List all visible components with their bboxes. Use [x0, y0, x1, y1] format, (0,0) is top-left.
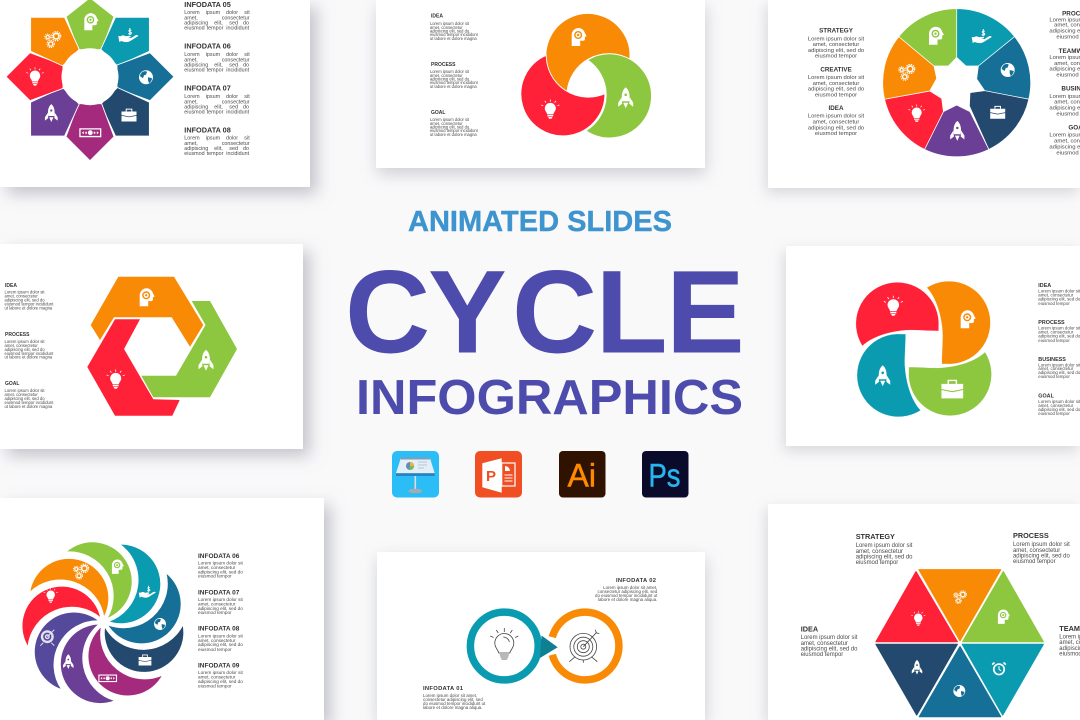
text: strategy: Lorem ipsum dolor sit — [856, 543, 913, 549]
text: infodata 06: sed — [229, 62, 238, 68]
text: infodata 02: do eiusmod tempor incididunt ut — [595, 593, 658, 598]
text: process — [1013, 531, 1070, 565]
text: infodata 07: sit — [244, 94, 250, 100]
text: infodata 08: eiusmod — [184, 151, 205, 157]
text: infodata 06 to 09: INFODATA 06 — [198, 553, 240, 560]
text: idea, process, goal: eiusmod tempor incididunt — [4, 302, 54, 306]
hexagon triangles chart — [876, 570, 1043, 717]
icon: light bulb — [490, 628, 518, 659]
panel: four-lobe pinwheel, middle right — [786, 246, 1080, 446]
three-circle icons — [541, 28, 633, 119]
text: strategy, creative, idea: eiusmod tempor — [815, 131, 857, 137]
hexagon ring icons — [107, 288, 214, 389]
text: infodata 05: dolor — [226, 10, 238, 16]
text: idea, process, goal: adipiscing elit, sed do — [4, 396, 45, 401]
text: infodata 06: elit, — [214, 62, 223, 68]
text: strategy: eiusmod tempor — [856, 560, 898, 566]
text: infodata 05: adipiscing — [184, 20, 208, 26]
text: infodata 07: consectetur — [222, 99, 250, 105]
text: idea — [801, 624, 858, 658]
text: process: amet, consectetur — [1013, 548, 1060, 554]
text: idea, process, goal: Lorem ipsum dolor sit — [4, 388, 45, 393]
text: strategy, creative, idea — [808, 28, 865, 137]
text: strategy, creative, idea: amet, consectetur — [813, 120, 859, 126]
text: infodata 08: sed — [229, 146, 238, 152]
text: idea, process, business, goal: adipiscing elit, sed do — [1038, 334, 1080, 338]
text: infodata 05 — [184, 0, 250, 32]
text: strategy, creative, idea: Lorem ipsum dolor sit — [808, 36, 865, 42]
text: infodata 08 — [184, 125, 250, 157]
text: idea, process, business, goal: PROCESS — [1038, 320, 1065, 326]
text: goal: amet, consectetur — [430, 121, 463, 126]
text: infodata 01: INFODATA 01 — [423, 686, 464, 692]
octagon icons — [26, 13, 153, 137]
text: infodata 06: do — [243, 62, 249, 68]
text: strategy: amet, consectetur — [856, 549, 903, 555]
text: infodata 01: do eiusmod tempor incididunt ut — [423, 701, 486, 706]
text: process — [430, 62, 479, 89]
text: idea: eiusmod tempor incididunt — [430, 32, 479, 37]
text: process: Lorem ipsum dolor sit — [1013, 542, 1070, 548]
icon: photoshop — [642, 451, 688, 498]
three-circle chart — [521, 14, 652, 138]
text: idea, process, business, goal: Lorem ipsum dolor sit — [1038, 288, 1080, 294]
text: idea, process, business, goal: eiusmod tempor — [1038, 301, 1070, 306]
text: infodata 06 — [184, 42, 250, 73]
text: strategy, creative, idea: CREATIVE — [820, 66, 852, 73]
text: idea, process, goal: Lorem ipsum dolor sit — [4, 339, 45, 344]
text: infodata 06: ipsum — [206, 52, 221, 58]
text: goal — [430, 110, 479, 137]
text: infodata 08: consectetur — [222, 141, 250, 147]
text: infodata 05: incididunt — [226, 26, 250, 32]
text: infodata 06: INFODATA 06 — [184, 42, 231, 51]
text: infodata 06: Lorem — [184, 52, 200, 58]
swirl chart — [18, 536, 192, 710]
text: idea, process, goal: eiusmod tempor incididunt — [4, 351, 54, 356]
text: infodata 08: sit — [244, 136, 250, 142]
text: strategy, creative, idea: STRATEGY — [819, 28, 854, 34]
hexagon triangle icons — [911, 591, 1010, 697]
orange ring — [552, 612, 619, 680]
text: infodata 08: INFODATA 08 — [184, 125, 231, 134]
text: goal: adipiscing elit, sed do — [430, 124, 470, 129]
text: idea, process, business, goal: Lorem ipsum dolor sit — [1038, 326, 1080, 330]
text: infodata 06 to 09: eiusmod tempor — [198, 610, 232, 615]
octagon chart — [6, 0, 174, 161]
text: infodata 06 to 09: eiusmod tempor — [198, 647, 232, 652]
text: infodata 06 to 09: Lorem ipsum dolor sit — [198, 670, 244, 675]
text: infodata 05: elit, — [214, 20, 223, 26]
text: idea: adipiscing elit, sed do — [430, 28, 470, 33]
text: process, teamwork, business, goal — [1049, 10, 1080, 156]
icon: photoshop: Ps — [648, 458, 680, 494]
text: idea, process, business, goal: eiusmod tempor — [1038, 374, 1070, 379]
text: idea, process, business, goal: BUSINESS — [1038, 357, 1066, 363]
hexagon ring chart — [87, 277, 237, 416]
text: infodata 01: consectetur adipiscing elit, sed — [423, 697, 483, 702]
text: process: adipiscing elit, sed do — [1013, 554, 1070, 560]
text: infodata 07: ipsum — [206, 94, 221, 100]
text: idea: Lorem ipsum dolor sit — [801, 635, 858, 641]
text: infodata 07: elit, — [214, 104, 223, 110]
panel: nine-petal swirl, bottom left — [0, 498, 324, 720]
icon: powerpoint: P — [486, 468, 496, 485]
text: infodata 05: INFODATA 05 — [184, 0, 231, 9]
text: strategy, creative, idea: amet, consectetur — [813, 42, 859, 48]
icon: illustrator — [559, 451, 606, 498]
text: infodata 02: labore et dolore magna aliqua. — [598, 597, 657, 602]
text: idea: amet, consectetur — [801, 641, 848, 647]
text: infodata 08: do — [243, 146, 249, 152]
text: infodata 07: INFODATA 07 — [184, 84, 231, 93]
text: infodata 06 to 09: amet, consectetur — [198, 675, 236, 680]
text: infodata 05: do — [243, 20, 249, 26]
text: infodata 05: sed — [229, 20, 238, 26]
text: infodata 06 to 09: adipiscing elit, sed do — [198, 679, 243, 684]
text: strategy, creative, idea: adipiscing elit, sed do — [808, 87, 865, 93]
text: infodata 06 to 09: adipiscing elit, sed do — [198, 569, 243, 574]
text: process: adipiscing elit, sed do — [430, 76, 470, 81]
text: infodata 07: tempor — [207, 109, 224, 115]
text: strategy, creative, idea: amet, consectetur — [813, 81, 859, 87]
text: idea, process, goal: ut labore et dolore magna — [4, 305, 53, 310]
text: idea, process, business, goal: eiusmod tempor — [1038, 338, 1070, 343]
text: strategy — [856, 532, 913, 566]
text: infodata 06 to 09 — [198, 553, 244, 688]
icon: target with arrow — [569, 630, 599, 663]
text: idea, process, goal: adipiscing elit, sed do — [4, 298, 45, 302]
text: idea, process, goal: Lorem ipsum dolor sit — [4, 290, 45, 295]
text: teamwork — [1059, 624, 1080, 658]
text: idea, process, goal: amet, consectetur — [4, 392, 38, 397]
text: process: Lorem ipsum dolor sit — [430, 69, 470, 74]
text: idea, process, business, goal: amet, consectetur — [1038, 330, 1074, 334]
text: infodata 01: labore et dolore magna aliqua. — [423, 705, 482, 710]
text: infodata 08: amet, — [184, 141, 198, 147]
text: infodata 06 to 09: adipiscing elit, sed do — [198, 642, 243, 647]
text: idea, process, goal: GOAL — [5, 381, 19, 387]
text: idea, process, business, goal: adipiscing elit, sed do — [1038, 370, 1080, 375]
title: infographics: INFOGRAPHICS — [356, 371, 743, 425]
text: strategy, creative, idea: eiusmod tempor — [815, 92, 857, 98]
text: infodata 06 to 09: Lorem ipsum dolor sit — [198, 597, 244, 602]
text: infodata 01: Lorem ipsum dolor sit amet, — [423, 693, 477, 698]
text: infodata 08: adipiscing — [184, 146, 208, 152]
text: strategy, creative, idea: Lorem ipsum dolor sit — [808, 75, 865, 81]
text: idea, process, goal: ut labore et dolore magna — [4, 354, 53, 360]
swirl icons — [40, 560, 166, 682]
text: infodata 02 — [595, 578, 658, 602]
text: process: PROCESS — [1013, 531, 1049, 540]
icon: illustrator: Ai — [568, 458, 596, 494]
text: infodata 06: consectetur — [222, 57, 250, 63]
text: idea, process, goal: amet, consectetur — [4, 343, 38, 348]
text: infodata 08: ipsum — [206, 136, 221, 142]
text: infodata 06 to 09: INFODATA 07 — [198, 589, 240, 596]
text: infodata 06 to 09: amet, consectetur — [198, 638, 236, 643]
text: idea, process, business, goal: amet, consectetur — [1038, 366, 1074, 371]
text: infodata 07: amet, — [184, 99, 198, 105]
text: idea, process, business, goal — [1038, 283, 1080, 416]
text: idea: adipiscing elit, sed do — [801, 646, 858, 652]
wheel icons — [899, 27, 1015, 141]
text: infodata 06 to 09: eiusmod tempor — [198, 574, 232, 579]
text: process: amet, consectetur — [430, 73, 463, 78]
text: infodata 08: Lorem — [184, 136, 200, 142]
text: infodata 01 — [423, 686, 486, 710]
text: strategy, creative, idea: Lorem ipsum dolor sit — [808, 114, 865, 120]
text: process: ut labore et dolore magna — [430, 84, 477, 89]
text: infodata 06 to 09: INFODATA 08 — [198, 626, 240, 633]
text: infodata 08: elit, — [214, 146, 223, 152]
text: infodata 05: tempor — [207, 26, 224, 32]
pinwheel chart — [856, 281, 992, 417]
text: goal: eiusmod tempor incididunt — [430, 128, 479, 133]
teal ring with arrow — [470, 612, 558, 680]
text: infodata 06: tempor — [207, 67, 224, 73]
text: strategy: STRATEGY — [856, 532, 895, 541]
text: infodata 02: Lorem ipsum dolor sit amet, — [603, 585, 657, 590]
text: goal: GOAL — [431, 110, 445, 116]
text: infodata 08: dolor — [226, 136, 238, 142]
text: idea, process, business, goal: amet, consectetur — [1038, 403, 1074, 408]
wheel chart — [883, 9, 1031, 157]
text: goal: ut labore et dolore magna — [430, 132, 477, 137]
panel: two-ring process, bottom centre — [377, 552, 705, 720]
text: idea, process, goal — [4, 283, 54, 409]
text: idea, process, business, goal: amet, consectetur — [1038, 292, 1074, 298]
text: infodata 05: ipsum — [206, 10, 221, 16]
text: idea: Lorem ipsum dolor sit — [430, 21, 470, 26]
text: idea, process, business, goal: adipiscing elit, sed do — [1038, 296, 1080, 302]
text: infodata 07: dolor — [226, 94, 238, 100]
text: strategy, creative, idea: IDEA — [828, 105, 844, 112]
text: infodata 06 to 09: Lorem ipsum dolor sit — [198, 561, 244, 566]
text: infodata 07: incididunt — [226, 109, 250, 115]
text: idea, process, goal: PROCESS — [5, 332, 30, 338]
text: infodata 06 to 09: amet, consectetur — [198, 601, 236, 606]
panel: infodata octagon, top left — [0, 0, 310, 187]
text: process: PROCESS — [431, 62, 456, 68]
text: infodata 05: sit — [244, 10, 250, 16]
text: idea, process, business, goal: GOAL — [1038, 394, 1055, 400]
icon: keynote — [392, 451, 439, 498]
text: idea: ut labore et dolore magna — [430, 36, 477, 41]
text: idea, process, business, goal: eiusmod tempor — [1038, 411, 1070, 416]
text: infodata 06: amet, — [184, 57, 198, 63]
text: strategy, creative, idea: eiusmod tempor — [815, 54, 857, 60]
panel: hexagon triangles, bottom right — [768, 504, 1080, 720]
text: infodata 06: eiusmod — [184, 67, 205, 73]
text: infodata 05: consectetur — [222, 16, 250, 22]
title: cycle: CYCLE — [345, 247, 745, 379]
panel: hexagon ring, middle left — [0, 244, 303, 449]
text: idea, process, business, goal: IDEA — [1038, 283, 1051, 289]
text: idea, process, goal: IDEA — [5, 283, 17, 289]
text: idea — [430, 14, 479, 41]
text: infodata 05: Lorem — [184, 10, 200, 16]
text: infodata 02: INFODATA 02 — [616, 578, 656, 584]
text: infodata 06 to 09: adipiscing elit, sed do — [198, 606, 243, 611]
text: infodata 07: sed — [229, 104, 238, 110]
text: idea, process, business, goal: Lorem ipsum dolor sit — [1038, 399, 1080, 404]
text: infodata 08: tempor — [207, 151, 224, 157]
text: idea, process, business, goal: Lorem ipsum dolor sit — [1038, 362, 1080, 368]
text: idea, process, goal: adipiscing elit, sed do — [4, 347, 45, 352]
text: infodata 02: consectetur adipiscing elit, sed — [598, 589, 658, 594]
pinwheel icons — [875, 296, 976, 398]
text: idea, process, business, goal: adipiscing elit, sed do — [1038, 407, 1080, 412]
text: process: eiusmod tempor — [1013, 559, 1056, 565]
text: idea, process, goal: amet, consectetur — [4, 294, 38, 299]
text: infodata 06: dolor — [226, 52, 238, 58]
text: infodata 07: do — [243, 104, 249, 110]
text: idea, process, goal: ut labore et dolore magna — [4, 404, 53, 409]
panel: seven-segment wheel, top right — [768, 0, 1080, 188]
text: idea, process, goal: eiusmod tempor incididunt — [4, 400, 54, 405]
panel: three-circle cycle, top centre — [376, 0, 705, 168]
text: infodata 07: Lorem — [184, 94, 200, 100]
text: infodata 06 to 09: INFODATA 09 — [198, 662, 240, 669]
text: infodata 06: sit — [244, 52, 250, 58]
text: infodata 07: adipiscing — [184, 104, 208, 110]
text: infodata 07: eiusmod — [184, 109, 205, 115]
text: idea: IDEA — [431, 14, 443, 20]
text: infodata 06: adipiscing — [184, 62, 208, 68]
text: strategy, creative, idea: adipiscing elit, sed do — [808, 125, 865, 131]
icon: powerpoint — [475, 451, 522, 498]
text: infodata 06 to 09: amet, consectetur — [198, 565, 236, 570]
text: infodata 05: amet, — [184, 16, 198, 22]
text: infodata 06 to 09: eiusmod tempor — [198, 683, 232, 688]
text: infodata 07 — [184, 84, 250, 115]
text: process: eiusmod tempor incididunt — [430, 80, 479, 85]
subtitle: animated slides: ANIMATED SLIDES — [408, 206, 672, 238]
text: goal: Lorem ipsum dolor sit — [430, 117, 470, 122]
text: strategy: adipiscing elit, sed do — [856, 554, 913, 560]
text: infodata 06 to 09: Lorem ipsum dolor sit — [198, 634, 244, 639]
text: strategy, creative, idea: adipiscing elit, sed do — [808, 48, 865, 54]
text: infodata 06: incididunt — [226, 67, 250, 73]
text: idea: amet, consectetur — [430, 25, 463, 30]
text: infodata 05: eiusmod — [184, 26, 205, 32]
text: idea: IDEA — [801, 624, 819, 633]
text: infodata 08: incididunt — [226, 151, 250, 157]
text: idea: eiusmod tempor — [801, 652, 843, 658]
